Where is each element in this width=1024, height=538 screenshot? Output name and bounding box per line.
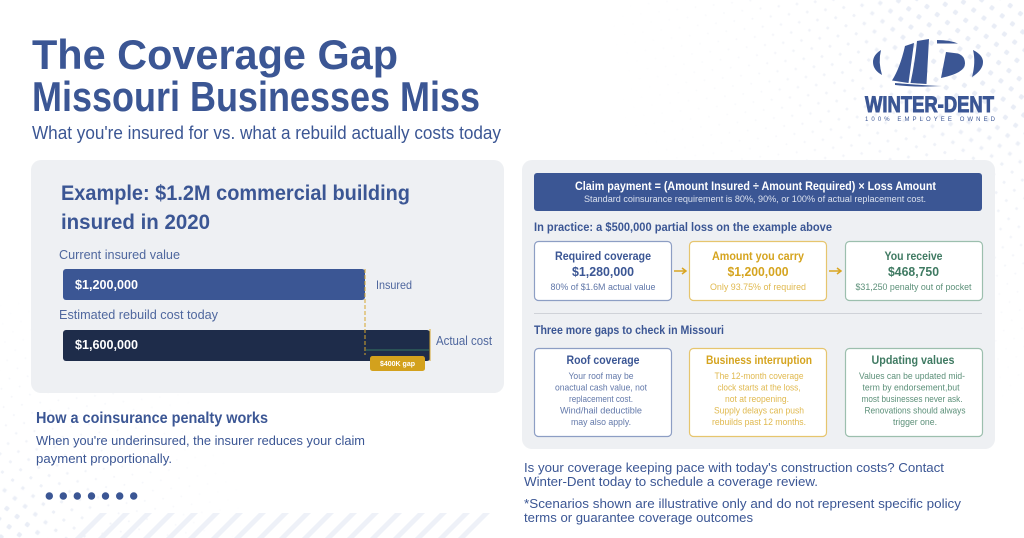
card: amount you carry: $1,200,000 [728,265,789,279]
card: updating values: Renovations should always [864,406,966,416]
card: roof coverage: onactual cash value, not [555,382,647,394]
disclaimer text [524,497,962,525]
card: updating values: Values can be updated mid- [859,371,965,382]
text: coinsurance explanation [36,433,365,466]
card: business interruption: not at reopening. [725,394,789,405]
card: required coverage: 80% of $1.6M actual value [550,282,656,292]
bar: insured: $1,200,000 [75,278,138,292]
title: The Coverage Gap [32,31,398,78]
card: amount you carry: Only 93.75% of required [710,282,806,292]
label: estimated rebuild cost: Estimated rebuild cost today [59,307,218,322]
card: business interruption [690,348,826,436]
card: updating values: most businesses never ask. [862,394,962,405]
badge: $400K gap: $400K gap [380,359,415,368]
gap marker [365,269,430,361]
text: coinsurance explanation: When you're underinsured, the insurer reduces your claim [36,433,365,448]
arrow [674,268,686,274]
card: amount you carry [690,242,826,300]
card: updating values: term by endorsement,but [862,382,960,394]
card: roof coverage: may also apply. [571,417,631,428]
logo tagline: 100% EMPLOYEE OWNED [865,117,996,123]
subtitle: What you're insured for vs. what a rebuild actually costs today [32,123,501,143]
call to action text: Winter-Dent today to schedule a coverage review. [524,475,818,489]
label: current insured value: Current insured value [59,247,180,262]
disclaimer text: *Scenarios shown are illustrative only and do not represent specific policy [524,497,962,511]
card: required coverage [534,242,672,300]
card: you receive: $468,750 [888,265,939,279]
card: updating values [846,348,982,436]
card: business interruption: Business interruption [706,353,812,367]
card: updating values: trigger one. [893,417,937,428]
card: you receive [846,242,982,300]
heading: in practice: In practice: a $500,000 partial loss on the example above [534,220,832,234]
text: coinsurance explanation: payment proportionally. [36,451,172,466]
card: roof coverage: Wind/hail deductible [560,406,642,416]
bar: actual cost [63,330,430,361]
panel: example building [31,160,504,393]
formula banner: Standard coinsurance requirement is 80%, 90%, or 100% of actual replacement cost. [584,194,926,204]
card: roof coverage: replacement cost. [569,394,633,405]
logo: Winter-Dent [865,39,996,123]
call to action text: Is your coverage keeping pace with today's construction costs? Contact [524,461,945,475]
panel heading: Example: $1.2M commercial building [61,182,410,205]
card: roof coverage: Roof coverage [566,353,640,367]
card: you receive: $31,250 penalty out of pocket [856,282,972,292]
formula banner: Claim payment = (Amount Insured ÷ Amount Required) × Loss Amount [575,179,936,193]
title [32,31,480,120]
title: Missouri Businesses Miss [32,73,480,120]
card: business interruption: The 12-month coverage [714,371,804,382]
card: business interruption: Supply delays can push [714,406,804,416]
bar: insured [63,269,365,300]
formula banner [534,173,982,211]
heading: coinsurance penalty: How a coinsurance penalty works [36,410,268,427]
card: business interruption: rebuilds past 12 months. [712,417,806,428]
logo wordmark: WINTER-DENT [865,92,994,117]
card: roof coverage [534,348,672,436]
disclaimer text: terms or guarantee coverage outcomes [524,511,753,525]
bar: actual cost: $1,600,000 [75,338,138,352]
card: you receive: You receive [884,249,943,263]
arrow [829,268,841,274]
card: updating values: Updating values [872,353,955,367]
card: business interruption: clock starts at the loss, [718,382,800,394]
decorative dot row [46,492,137,500]
label: actual cost: Actual cost [436,334,492,348]
panel: claim calculation and gaps [522,160,995,449]
card: required coverage: $1,280,000 [572,265,634,279]
panel heading: insured in 2020 [61,211,210,234]
badge: $400K gap [370,356,425,371]
call to action text [524,461,945,489]
icon: WD oval mark [873,39,983,87]
panel heading [61,182,410,234]
label: insured: Insured [376,278,412,292]
card: amount you carry: Amount you carry [712,249,804,263]
card: roof coverage: Your roof may be [568,371,634,382]
heading: three more gaps: Three more gaps to check in Missouri [534,323,724,337]
card: required coverage: Required coverage [555,249,651,263]
